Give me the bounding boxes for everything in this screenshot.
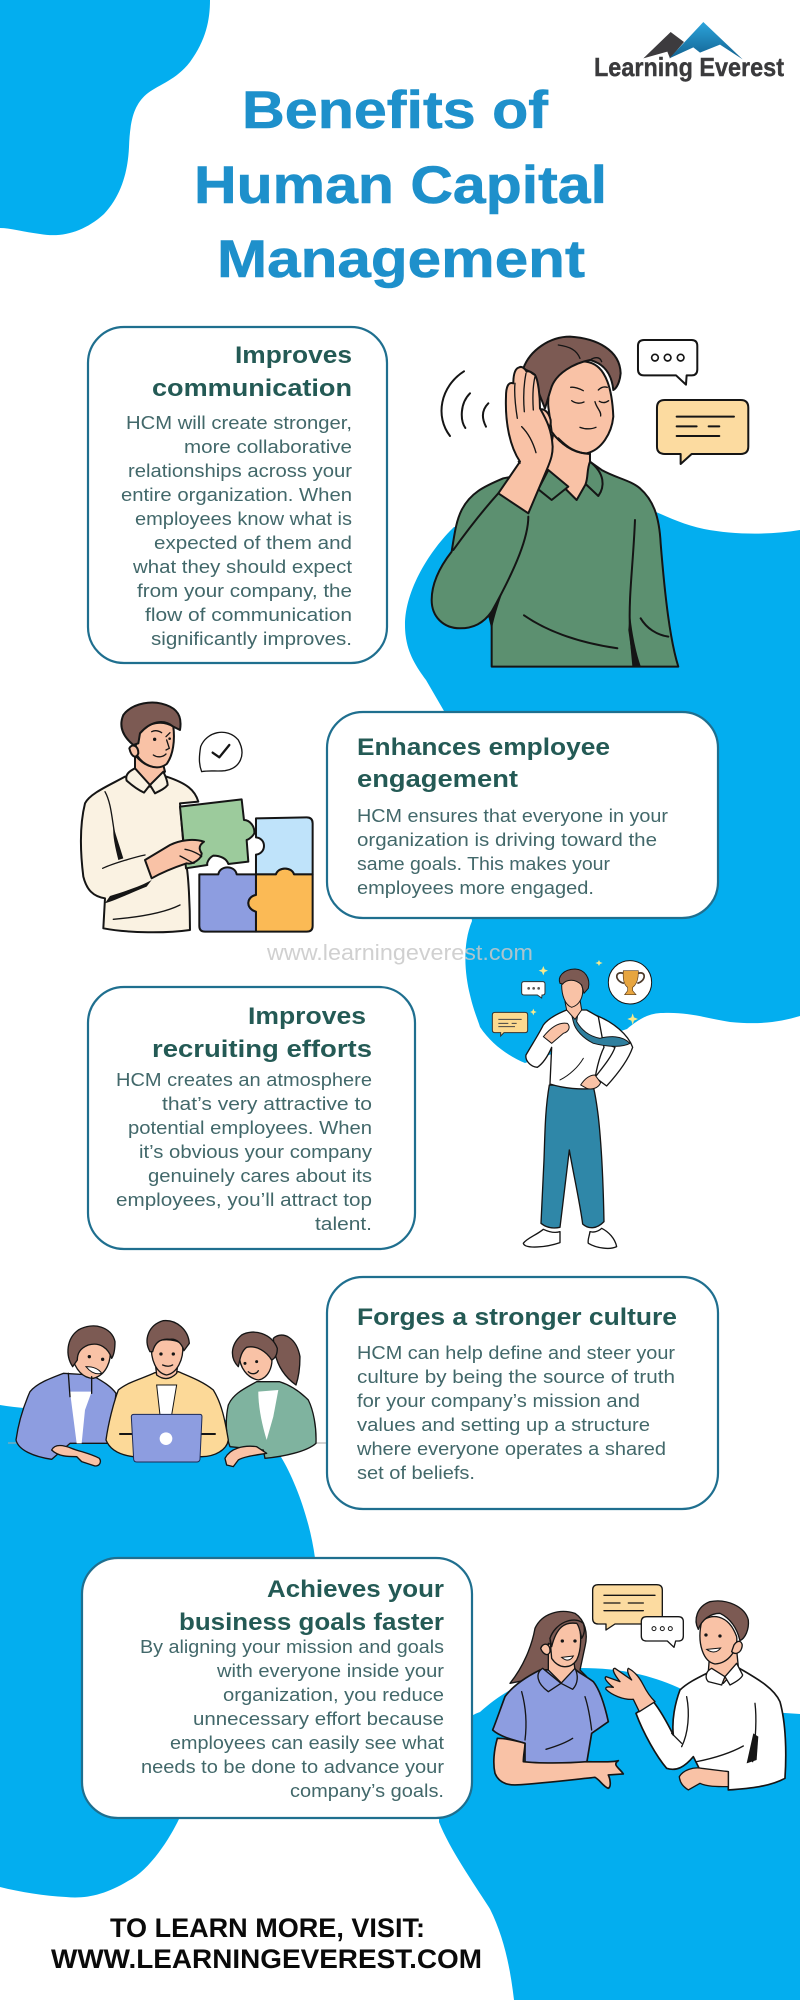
speech bubble: message [492,1012,528,1036]
heading: Improves [235,342,352,369]
body text: from your company, the [137,580,352,601]
body text: values and setting up a structure [357,1414,650,1435]
hand and forearm [498,367,553,513]
heading: Enhances employee [357,734,610,761]
title: Human Capital [194,156,607,215]
body text: HCM creates an atmosphere [116,1069,372,1090]
sparkles [530,960,638,1025]
body text: with everyone inside your [216,1660,444,1681]
speech bubble: dots [522,982,545,998]
illustration: man with puzzle [81,703,313,932]
shirt [432,462,678,667]
blob: lower left [0,1405,315,1897]
trophy badge [608,961,652,1004]
pants [541,1085,604,1228]
body text: flow of communication [145,604,352,625]
title: Benefits of [242,81,548,140]
puzzle piece: light blue [256,817,313,874]
illustration: three colleagues at laptop [16,1321,316,1467]
illustration: woman and man talking [493,1585,786,1790]
body text: organization is driving toward the [357,829,657,850]
speech bubble: message [593,1585,662,1630]
footer call to action: TO LEARN MORE, VISIT: [110,1913,425,1943]
panel: enhances employee engagement [327,712,718,918]
speech bubble: dots [638,340,697,385]
title [194,81,607,289]
body text: same goals. This makes your [357,853,610,874]
body text: where everyone operates a shared [356,1438,666,1459]
heading [152,342,352,402]
panel: forges a stronger culture [8,1277,718,1509]
hair [121,703,181,745]
speech bubble: dots [641,1617,683,1647]
heading [357,734,610,793]
panel: improves recruiting efforts [88,987,415,1249]
body text: employees more engaged. [357,877,594,898]
watermark: www.learningeverest.com [266,940,533,965]
heading [179,1576,444,1636]
face details [571,387,609,429]
heading: Forges a stronger culture [357,1304,677,1331]
body text: relationships across your [128,460,352,481]
body text [357,805,668,898]
body text [116,1069,373,1234]
heading: Achieves your [267,1576,444,1603]
body text: genuinely cares about its [148,1165,372,1186]
panel: improves communication [88,327,387,663]
colleague: centre [106,1321,228,1462]
body text: potential employees. When [128,1117,372,1138]
body text: for your company’s mission and [357,1390,640,1411]
neck and face [547,432,590,500]
body text: more collaborative [184,436,352,457]
speech bubble: message [657,400,748,464]
colleague: left [16,1326,116,1466]
body text: company’s goals. [290,1780,444,1801]
heading: recruiting efforts [152,1036,372,1063]
colleague: right [225,1332,316,1467]
footer call to action: WWW.LEARNINGEVEREST.COM [51,1944,482,1974]
woman [493,1611,623,1788]
body text [121,412,352,649]
body text: HCM will create stronger, [126,412,352,433]
shirt torso and left arm [526,1010,604,1089]
body text: significantly improves. [151,628,352,649]
body text: needs to be done to advance your [141,1756,444,1777]
hair [523,337,621,408]
logo mark: mountains [643,22,743,59]
neck and head [135,755,165,787]
body text: culture by being the source of truth [357,1366,675,1387]
blob: lower right [439,1668,800,2000]
illustration: man listening [432,337,748,667]
shirt right arm [595,1015,633,1086]
face details [152,731,170,757]
collar [538,462,603,500]
puzzle piece: orange [248,869,313,932]
body text: what they should expect [132,556,352,577]
body text: employees, you’ll attract top [116,1189,372,1210]
ear [536,409,551,429]
body text: entire organization. When [121,484,352,505]
laptop [131,1414,202,1462]
man raised hand [605,1668,655,1712]
body text: By aligning your mission and goals [140,1636,444,1657]
speech bubble: check [199,732,242,772]
blob: middle right [405,512,800,1063]
body text: that’s very attractive to [162,1093,372,1114]
man resting hand [679,1768,728,1790]
footer call to action [51,1913,482,1974]
body text: unnecessary effort because [193,1708,444,1729]
blob: top left [0,0,210,235]
body text: it’s obvious your company [139,1141,373,1162]
sound waves [442,371,488,436]
body text: set of beliefs. [357,1462,475,1483]
body text [356,1342,675,1483]
heading: Improves [248,1003,366,1030]
collar [126,768,168,793]
logo wordmark: Learning Everest [594,52,784,82]
puzzle piece: green [180,799,254,868]
shoes [523,1229,560,1247]
puzzle piece: purple [199,867,256,932]
body text [140,1636,444,1801]
body text: HCM ensures that everyone in your [357,805,668,826]
body text: talent. [315,1213,372,1234]
hand on chest [543,1023,569,1043]
body text: HCM can help define and steer your [357,1342,675,1363]
heading: engagement [357,766,518,793]
body text: employees know what is [135,508,352,529]
neck and head [565,1000,582,1019]
sweater [81,777,198,932]
logo [594,22,784,82]
illustration: confident man with trophy [492,960,652,1248]
tie [572,1015,630,1046]
man [605,1601,786,1790]
hand on hip [581,1075,601,1089]
heading: communication [152,375,352,402]
heading: business goals faster [179,1609,444,1636]
heading [152,1003,372,1063]
hand [145,840,204,878]
title: Management [217,230,585,289]
panel: achieves your business goals faster [82,1558,472,1818]
body text: expected of them and [154,532,352,553]
body text: organization, you reduce [223,1684,444,1705]
body text: employees can easily see what [170,1732,444,1753]
